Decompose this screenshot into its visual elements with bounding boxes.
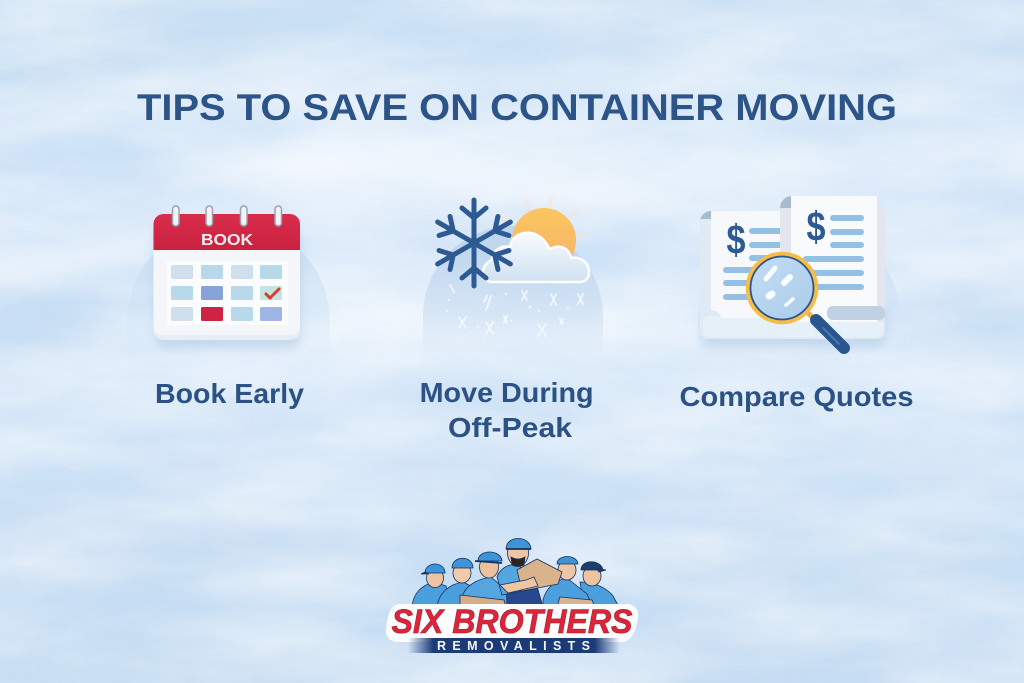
- icon backdrop arc: [423, 226, 603, 375]
- icon: right quote document: $: [806, 203, 826, 250]
- mover crew illustration: [412, 538, 619, 607]
- icon backdrop arc: [698, 220, 901, 372]
- icon: cloud: [483, 233, 589, 282]
- logo strapline bar: [408, 638, 620, 653]
- icon: sun with rays: [501, 199, 586, 272]
- mover 1: [412, 564, 452, 607]
- panel: compare quotes: [680, 196, 914, 412]
- icon: calendar: [154, 206, 300, 348]
- logo banner: [386, 604, 638, 642]
- icon: snowflake: [432, 200, 516, 286]
- logo: six brothers removalists: [386, 538, 638, 653]
- icon: folder base: [700, 211, 885, 348]
- icon: magnifying glass: [748, 254, 844, 348]
- central mover with box: [497, 538, 562, 607]
- label: book early: Book Early: [155, 378, 304, 409]
- logo wordmark: SIX BROTHERS: [392, 603, 633, 641]
- panel: move during off-peak: [420, 199, 603, 443]
- label: move during off-peak: Off-Peak: [448, 412, 572, 443]
- icon: left quote document: [700, 211, 785, 318]
- label: compare quotes: Compare Quotes: [680, 381, 914, 412]
- mover 6: [580, 562, 619, 607]
- icon: red check mark: [266, 289, 279, 298]
- snow speckles: [450, 285, 583, 336]
- icon: left quote document: $: [726, 216, 746, 263]
- icon: right quote document: [780, 196, 885, 322]
- icon: calendar: BOOK: [201, 232, 254, 249]
- label: move during off-peak: Move During: [420, 377, 594, 408]
- calendar rings: [172, 206, 282, 226]
- logo strapline: REMOVALISTS: [437, 639, 590, 653]
- panel: book early: [127, 206, 330, 409]
- icon backdrop arc: [127, 221, 330, 372]
- mover 3: [460, 552, 508, 607]
- title: TIPS TO SAVE ON CONTAINER MOVING: [137, 87, 897, 128]
- mover 5: [543, 556, 595, 607]
- mover 2: [437, 558, 483, 607]
